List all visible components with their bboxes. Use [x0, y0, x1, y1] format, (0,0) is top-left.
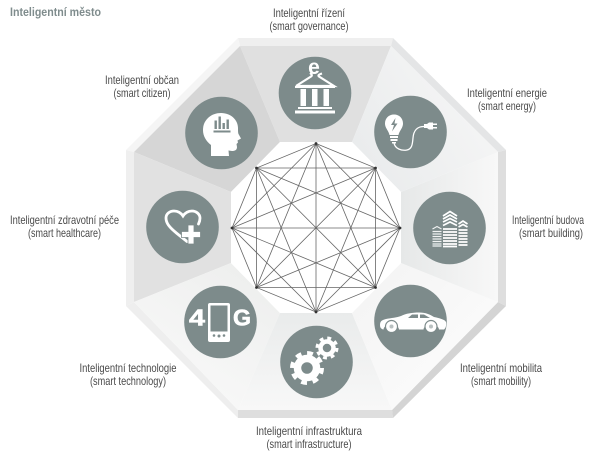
label: building: (smart building): [519, 226, 583, 240]
panel: octagon diagram: [126, 38, 506, 418]
icon: 4G phone: 4: [189, 304, 205, 330]
segment: infrastructure: [238, 313, 392, 410]
label: energy: (smart energy): [478, 99, 536, 113]
icon: gears: [280, 326, 353, 398]
label: citizen: Inteligentní občan: [105, 73, 179, 87]
segment: mobility: [352, 263, 498, 410]
label: healthcare: (smart healthcare): [28, 226, 101, 240]
label: infrastructure: (smart infrastructure): [266, 437, 352, 451]
label: infrastructure: Inteligentní infrastruktura: [256, 424, 362, 438]
center white octagon: [231, 142, 401, 313]
octagon outer bevel: [126, 38, 506, 418]
label: technology: (smart technology): [90, 374, 166, 388]
segment: energy: [352, 46, 498, 192]
icon: citizen head: [185, 97, 258, 169]
label: energy: Inteligentní energie: [467, 86, 547, 100]
icon: energy bulb and plug: [374, 96, 447, 168]
segment: citizen: [134, 46, 280, 192]
icon: governance: e: [308, 56, 320, 79]
label: energy: [467, 86, 547, 113]
icon: 4G phone: G: [233, 304, 251, 330]
label: technology: Inteligentní technologie: [80, 361, 177, 375]
network graph: [231, 142, 401, 313]
label: healthcare: [10, 213, 119, 240]
icon: 4G phone: [184, 286, 257, 358]
label: citizen: [105, 73, 179, 100]
label: building: [512, 213, 584, 240]
icon: governance: [279, 56, 351, 129]
label: governance: (smart governance): [270, 19, 348, 33]
title: Inteligentní město: [10, 7, 101, 19]
label: mobility: [460, 361, 542, 388]
label: healthcare: Inteligentní zdravotní péče: [10, 213, 119, 227]
segment: building: [401, 152, 498, 302]
label: governance: [270, 6, 348, 33]
segment: governance: [240, 46, 391, 142]
icon: car: [374, 285, 447, 357]
label: mobility: Inteligentní mobilita: [460, 361, 542, 375]
label: mobility: (smart mobility): [471, 374, 531, 388]
label: citizen: (smart citizen): [114, 86, 170, 100]
icon: buildings: [413, 192, 486, 264]
segment: technology: [134, 263, 280, 410]
label: infrastructure: [256, 424, 362, 451]
label: technology: [80, 361, 177, 388]
icon: heart plus: [146, 191, 219, 263]
label: governance: Inteligentní řízení: [273, 6, 346, 20]
segment: healthcare: [134, 152, 231, 302]
